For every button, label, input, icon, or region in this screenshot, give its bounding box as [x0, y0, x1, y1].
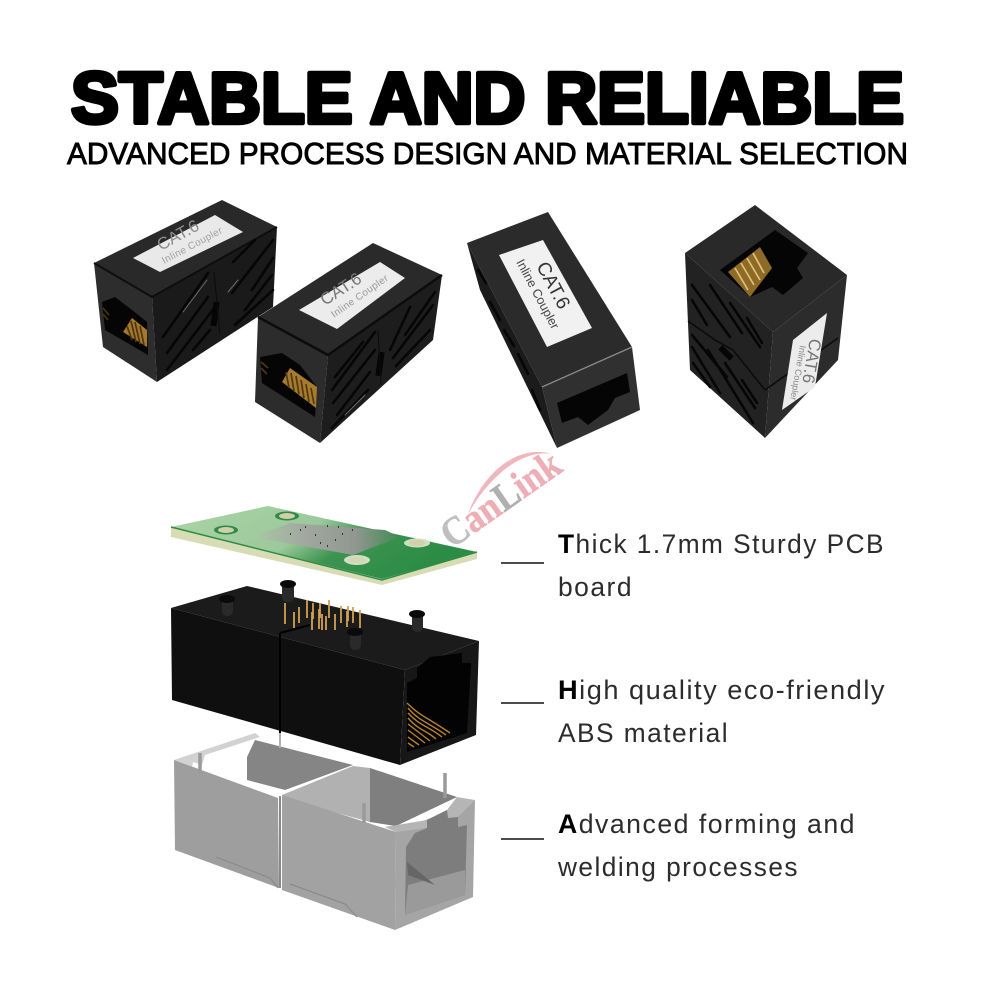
label: ABS material: ABS material: [558, 718, 729, 748]
product photo: coupler 3: Inline Coupler: [513, 257, 562, 332]
product photo: coupler 2: [255, 243, 442, 443]
product photo: coupler 1: CAT.6: [154, 216, 202, 254]
label: forming and welding: welding processes: [557, 852, 799, 882]
label: PCB board: [558, 529, 885, 602]
watermark: CanLink: CanLink: [431, 441, 570, 556]
callout line: forming: [501, 838, 544, 840]
callout line: ABS: [501, 702, 544, 704]
product photo: coupler 2: Inline Coupler: [329, 273, 391, 320]
label: PCB board: Thick 1.7mm Sturdy PCB: [558, 529, 885, 559]
product photo: coupler 3: CAT.6: [532, 258, 574, 313]
label: forming and welding: Advanced forming and: [558, 809, 856, 839]
exploded part: black ABS housing: [171, 580, 479, 765]
subtitle: ADVANCED PROCESS DESIGN AND MATERIAL SELECTION: [67, 137, 908, 171]
label: ABS material: [558, 675, 886, 748]
label: PCB board: board: [558, 572, 633, 602]
product photo: coupler 4: Inline Coupler: [788, 345, 808, 401]
label: forming and welding: [557, 809, 856, 882]
product photo: coupler 4: [685, 205, 847, 438]
exploded part: metal shield: [174, 733, 475, 930]
product photo: coupler 3: [467, 212, 640, 448]
exploded part: PCB board: [171, 506, 477, 585]
label: ABS material: High quality eco-friendly: [558, 675, 886, 705]
product photo: coupler 4: CAT.6: [798, 337, 825, 385]
product photo: coupler 2: CAT.6: [317, 269, 365, 309]
product photo: coupler 1: [94, 200, 277, 382]
title: STABLE AND RELIABLE: [71, 59, 904, 139]
product photo: coupler 1: Inline Coupler: [160, 225, 225, 267]
callout line: PCB: [501, 562, 544, 564]
